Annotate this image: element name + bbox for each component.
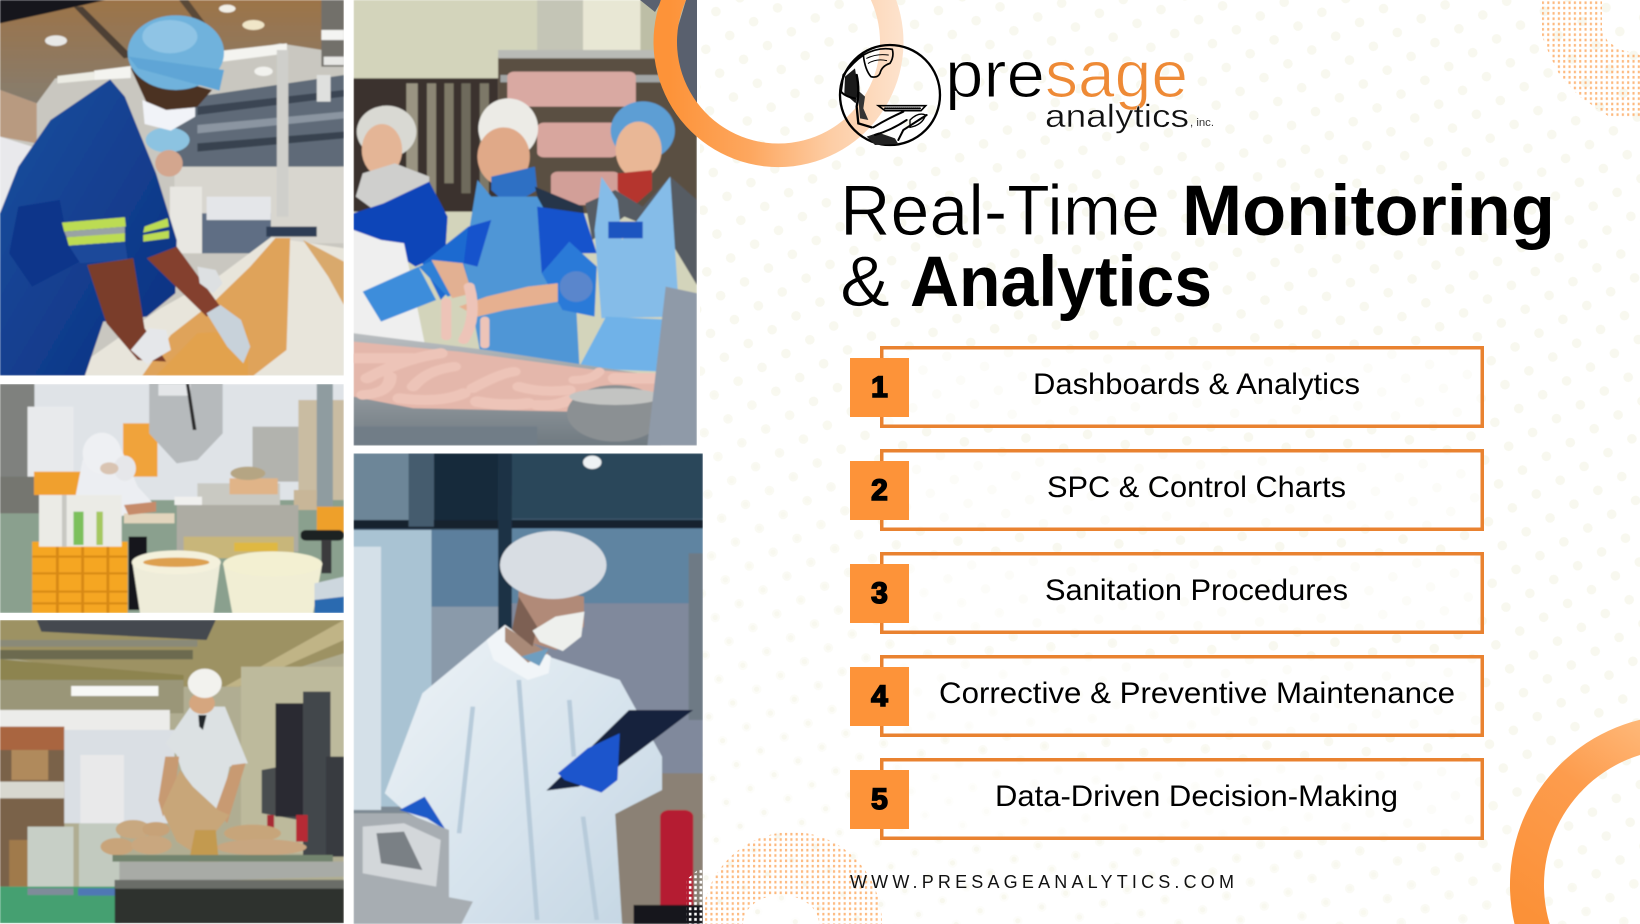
logo: Presage Analytics <box>840 37 1214 145</box>
photo: technician with clipboard in white coat <box>354 453 703 924</box>
title <box>840 172 1555 322</box>
photo: worker pouring grain sack in warehouse <box>0 620 344 923</box>
photo: food packaging room with orange crates <box>0 383 344 613</box>
wordmark: analytics, inc.: analytics <box>1045 98 1189 134</box>
photo: worker inspecting food on conveyor line <box>0 0 344 376</box>
list item 4: Corrective & Preventive Maintenance: 4 <box>871 680 888 713</box>
title: Monitoring <box>1182 172 1555 251</box>
title: Real-Time <box>840 172 1160 251</box>
list item 3: Sanitation Procedures: 3 <box>871 577 888 610</box>
list item 1: Dashboards & Analytics: 1 <box>871 371 888 404</box>
halftone: bottom centre <box>702 832 882 924</box>
list item 1: Dashboards & Analytics: Dashboards & Analytics <box>1033 368 1360 401</box>
icon: medallion with figure holding bowl <box>840 45 940 145</box>
photo: three workers making sausages <box>354 0 697 446</box>
list item 4: Corrective & Preventive Maintenance <box>850 657 1482 735</box>
list item 1: Dashboards & Analytics <box>850 348 1482 426</box>
list item 4: Corrective & Preventive Maintenance: Corrective & Preventive Maintenance <box>939 677 1455 710</box>
wordmark: presage: sage <box>1045 37 1188 111</box>
list item 5: Data-Driven Decision-Making: 5 <box>871 783 888 816</box>
decorative dots over photo <box>686 868 703 924</box>
list item 2: SPC & Control Charts <box>850 451 1482 529</box>
background polka dots <box>700 0 1640 924</box>
ring: top left orange arc <box>640 0 904 167</box>
list item 5: Data-Driven Decision-Making: Data-Driven Decision-Making <box>995 780 1398 813</box>
title: Analytics <box>910 243 1212 322</box>
halftone: top right <box>1542 0 1640 117</box>
title: & <box>840 243 890 322</box>
list item 5: Data-Driven Decision-Making <box>850 760 1482 838</box>
wordmark: presage <box>945 37 1188 111</box>
wordmark: analytics, inc.: , inc. <box>1190 117 1214 129</box>
list item 3: Sanitation Procedures <box>850 554 1482 632</box>
website url: WWW.PRESAGEANALYTICS.COM <box>850 872 1234 892</box>
ring: bottom right orange arc <box>1510 720 1640 924</box>
list item 2: SPC & Control Charts: SPC & Control Charts <box>1047 471 1346 504</box>
list item 2: SPC & Control Charts: 2 <box>871 474 888 507</box>
sausages on table <box>354 342 661 412</box>
list item 3: Sanitation Procedures: Sanitation Procedures <box>1045 574 1348 607</box>
wordmark: presage: pre <box>945 37 1045 111</box>
